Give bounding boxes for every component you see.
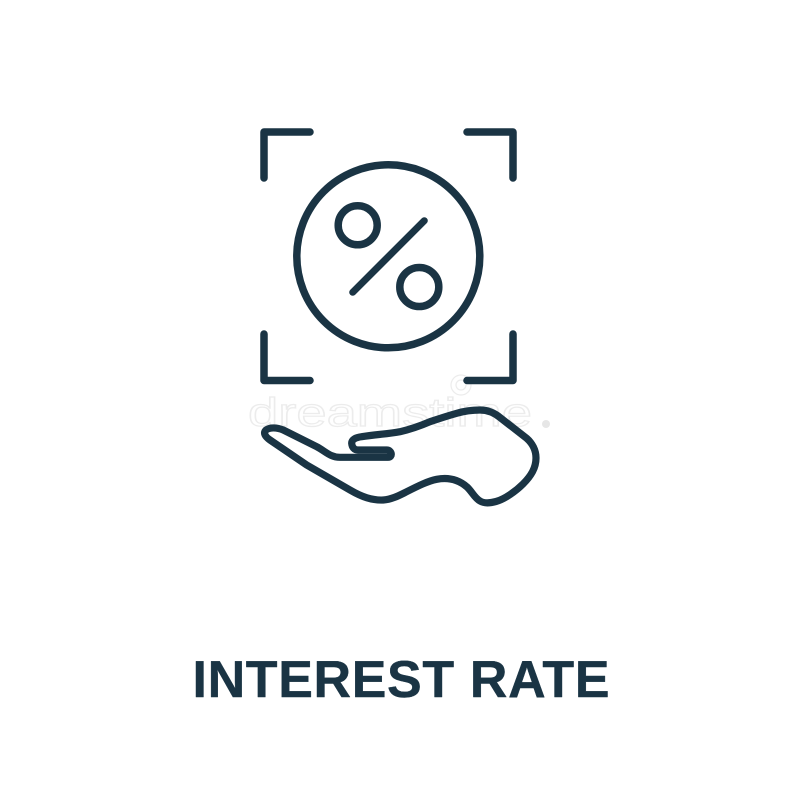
- icon: focus frame corners: [264, 132, 513, 380]
- icon: open hand: [265, 410, 536, 503]
- watermark: [248, 375, 550, 435]
- icon: percent in circle: [297, 165, 480, 348]
- title: INTEREST RATE: [192, 651, 610, 709]
- watermark: dreamstime: [248, 391, 532, 435]
